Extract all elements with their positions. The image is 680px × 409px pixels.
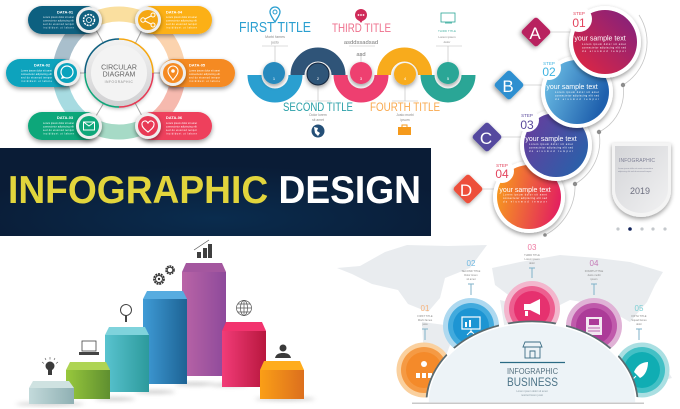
- icon: settings gear: [76, 7, 102, 33]
- node 4: 4: [404, 76, 407, 81]
- dome caption: Lorem ipsum dolor sit amet: [516, 389, 548, 393]
- step 02: consectetur adipiscing elit sed: [555, 94, 600, 98]
- pill: data 03: DATA-03: [57, 115, 74, 120]
- pagination dots: [616, 227, 667, 231]
- pill: data 03: consectetur adipiscing elit: [43, 126, 74, 128]
- label 02: SECOND TITLE: [462, 269, 481, 273]
- pill: data 01: [28, 6, 100, 34]
- text: fourth caption: ipsum: [400, 118, 410, 122]
- step 03: do eiusmod tempor: [529, 150, 573, 153]
- text: first caption: justo: [270, 40, 279, 44]
- pill: data 03: sed do eiusmod tempor: [43, 129, 74, 132]
- pill: data 01: consectetur adipiscing elit: [43, 20, 74, 22]
- step 03: 03: [520, 118, 534, 132]
- step 01: your sample text: [574, 36, 626, 42]
- world map backdrop: [337, 245, 672, 385]
- pill: data 01: sed do eiusmod tempor: [43, 23, 74, 26]
- step 03: [497, 108, 592, 181]
- diamond B: B: [502, 77, 514, 96]
- label 04: 04: [590, 259, 599, 268]
- heading: second title: SECOND TITLE: [283, 100, 353, 114]
- label 02: sit amet: [466, 277, 476, 281]
- text: second caption: [309, 113, 327, 122]
- center hub: INFOGRAPHIC: [105, 80, 133, 84]
- label 05: Squad fames: [631, 318, 647, 322]
- step 01: STEP: [573, 11, 585, 16]
- pill: data 05: consectetur adipiscing elit: [189, 73, 220, 76]
- label 03: THIRD TITLE: [524, 253, 540, 257]
- step 02: 02: [542, 65, 556, 79]
- label 04: FOURTH TITLE: [585, 269, 604, 273]
- pill: data 03: incididunt ut labore: [43, 132, 75, 136]
- pill: data 04: DATA-04: [166, 10, 183, 14]
- label 01: FIRST TITLE: [417, 314, 433, 318]
- icon: light bulb: [42, 357, 58, 375]
- diamond A: [520, 16, 552, 48]
- pill: data 04: incididunt ut labore: [166, 26, 198, 30]
- label 03: dolor: [529, 261, 535, 265]
- node 3: 3: [360, 76, 363, 81]
- diamond B: [493, 69, 525, 101]
- label 02: 02: [467, 259, 476, 268]
- shield badge: INFOGRAPHIC: [619, 158, 655, 164]
- pill: data 04: [138, 6, 212, 34]
- heading: third title: THIRD TITLE: [332, 21, 391, 35]
- step 03: STEP: [521, 113, 533, 118]
- center hub: DIAGRAM: [103, 72, 136, 78]
- icon: rising chart: [194, 240, 212, 258]
- step 04: 04: [495, 167, 509, 181]
- pill: data 06: Lorem ipsum dolor sit amet: [166, 122, 197, 125]
- pill: data 06: DATA-06: [166, 115, 183, 120]
- pill: data 04: consectetur adipiscing elit: [166, 20, 197, 22]
- shield badge: adipiscing elit sed do eiusmod tempor: [618, 170, 652, 173]
- icon: share: [135, 7, 161, 33]
- pill: data 02: [6, 59, 76, 87]
- label 04: [585, 259, 604, 295]
- step 04: do eiusmod tempor: [503, 200, 547, 204]
- text: third title small: [438, 29, 456, 44]
- icon: person: [275, 344, 291, 358]
- node 4: [393, 62, 417, 86]
- label 02: Dolor lorem: [464, 273, 478, 277]
- text: first caption: [265, 35, 285, 44]
- icon: briefcase: [398, 125, 411, 135]
- icon: gears: [154, 266, 174, 284]
- text: third caption: asd: [356, 52, 366, 58]
- pill: data 02: Lorem ipsum dolor sit amet: [21, 70, 52, 72]
- diamond C: [471, 121, 503, 153]
- circle 01: [396, 342, 452, 398]
- step 04: Lorem ipsum dolor sit amet: [503, 194, 547, 196]
- node 3: [350, 62, 372, 84]
- center hub: CIRCULAR: [101, 64, 137, 72]
- connector curves: [545, 15, 647, 235]
- diamond D: D: [460, 181, 472, 200]
- pill: data 03: [28, 112, 100, 140]
- node 5: [437, 62, 459, 84]
- diamond A: A: [529, 24, 541, 43]
- circle 04: [566, 298, 622, 354]
- step 02: STEP: [543, 61, 555, 66]
- panel: wave timeline: [239, 7, 468, 138]
- step 03: consectetur adipiscing elit sed: [529, 146, 574, 150]
- label 01: [417, 304, 433, 340]
- label 03: Lorem ipsum: [524, 257, 540, 261]
- label 02: [462, 259, 481, 295]
- icon: magnifier: [120, 304, 132, 322]
- icon: location pin: [270, 7, 280, 22]
- banner title: INFOGRAPHIC DESIGN: [8, 169, 421, 212]
- bar 4 blue: [143, 291, 187, 384]
- label 01: justo: [421, 322, 428, 326]
- pill: data 02: sed do eiusmod tempor: [21, 76, 52, 80]
- pill: data 06: consectetur adipiscing elit: [166, 126, 197, 128]
- step 02: [520, 56, 613, 128]
- label 01: 01: [421, 304, 430, 313]
- wave segments: [254, 54, 468, 96]
- icon: speech bubble: [355, 9, 367, 23]
- pill: data 05: [160, 59, 235, 87]
- label 01: Morbi fames: [418, 318, 433, 322]
- text: third title small: dolor: [444, 40, 450, 44]
- pill: data 04: Lorem ipsum dolor sit amet: [166, 16, 197, 19]
- pill: data 06: [138, 112, 212, 140]
- step 04: your sample text: [499, 187, 551, 194]
- spokes: [80, 30, 160, 116]
- text: first caption: Morbi fames: [265, 35, 285, 39]
- shield badge: [612, 143, 671, 217]
- pill: data 05: sed do eiusmod tempor: [189, 76, 220, 80]
- icon: store: [523, 342, 542, 358]
- pill: data 04: sed do eiusmod tempor: [166, 23, 197, 26]
- node 1: 1: [273, 76, 276, 81]
- text: fourth caption: Justo morbi: [396, 113, 414, 117]
- icon: map pin: [160, 60, 186, 86]
- pill: data 01: Lorem ipsum dolor sit amet: [43, 16, 74, 19]
- bar 7 orange: [260, 361, 304, 399]
- step 01: consectetur adipiscing elit sed: [582, 46, 627, 50]
- step 04: STEP: [496, 163, 508, 168]
- icon: monitor: [441, 13, 455, 23]
- circle 05: [614, 342, 670, 398]
- text: fourth caption: [396, 113, 414, 122]
- step 04: [473, 159, 565, 233]
- panel: infographic business: [337, 243, 672, 404]
- circle 02: [443, 298, 499, 354]
- banner: [0, 148, 431, 236]
- bar 3 teal: [105, 327, 149, 392]
- text: third title small: Lorem ipsum: [438, 35, 456, 39]
- label 05: FIFTH TITLE: [631, 314, 647, 318]
- bar 1 pale: [29, 381, 74, 404]
- shield badge: Lorem ipsum dolor sit amet consectetur: [618, 167, 653, 170]
- shield badge: 2019: [630, 186, 650, 196]
- node 2: 2: [317, 76, 320, 81]
- pill: data 03: Lorem ipsum dolor sit amet: [43, 122, 74, 125]
- bar 6 pink: [222, 322, 266, 387]
- heading: fourth title: FOURTH TITLE: [370, 100, 440, 114]
- text: third caption: asddssadsad: [344, 40, 378, 46]
- step 04: consectetur adipiscing elit sed: [503, 197, 548, 200]
- pill: data 05: incididunt ut labore: [189, 80, 221, 83]
- icon: chat: [54, 60, 80, 86]
- step 01: 01: [572, 16, 586, 30]
- circle 03: [504, 281, 560, 337]
- pill: data 05: Lorem ipsum dolor sit amet: [189, 70, 220, 72]
- diamond D: [452, 173, 484, 205]
- connector dots: [543, 83, 625, 237]
- pill: data 02: consectetur adipiscing elit: [21, 73, 52, 76]
- panel: circular diagram: [6, 6, 235, 140]
- node 1: [263, 62, 285, 84]
- text: third caption: [344, 40, 378, 58]
- pill: data 02: DATA-02: [34, 62, 51, 68]
- pill: data 05: DATA-05: [189, 62, 206, 68]
- step 03: your sample text: [525, 136, 577, 143]
- label 03: 03: [528, 243, 537, 252]
- label 04: ipsum: [591, 277, 597, 281]
- step 01: Lorem ipsum dolor sit amet: [582, 43, 626, 46]
- text: second caption: sit amet: [312, 118, 324, 122]
- node 2: [306, 62, 330, 86]
- label 04: Justo morbi: [587, 273, 601, 277]
- pill: data 06: sed do eiusmod tempor: [166, 129, 197, 132]
- text: third title small: THIRD TITLE: [438, 29, 456, 33]
- icon: globe: [312, 124, 324, 138]
- heading: first title: FIRST TITLE: [239, 19, 311, 36]
- dome subtitle: BUSINESS: [507, 375, 558, 389]
- center hub: [85, 39, 153, 107]
- pill: data 01: DATA-01: [57, 10, 74, 14]
- icon: envelope: [76, 113, 102, 139]
- label 05: [631, 304, 647, 340]
- icon: heart: [135, 113, 161, 139]
- bar 5 purple: [182, 263, 226, 376]
- pill: data 01: incididunt ut labore: [43, 26, 75, 30]
- step 01: [546, 6, 641, 78]
- step 02: your sample text: [546, 84, 598, 91]
- label 03: [524, 243, 540, 278]
- label 05: 05: [635, 304, 644, 313]
- pill: data 06: incididunt ut labore: [166, 132, 198, 136]
- bar 2 green: [66, 362, 110, 399]
- icon: laptop: [79, 341, 99, 355]
- step 02: Lorem ipsum dolor sit amet: [555, 91, 599, 94]
- dome caption: nostrud lorem justo: [521, 393, 544, 397]
- panel: 3D bar chart: [16, 240, 315, 406]
- dome title: INFOGRAPHIC: [507, 367, 558, 376]
- ring segments: [60, 14, 178, 132]
- panel: steps: [452, 6, 671, 237]
- icon: globe: [236, 300, 252, 316]
- dome caption: [516, 389, 548, 397]
- floor shadows: [16, 382, 315, 406]
- text: second caption: Dolor lorem: [309, 113, 327, 117]
- step 01: do eiusmod tempor: [582, 50, 626, 53]
- step 02: do eiusmod tempor: [555, 98, 599, 101]
- pill: data 02: incididunt ut labore: [21, 80, 53, 83]
- node 5: 5: [447, 76, 450, 81]
- connectors: [262, 46, 462, 101]
- step 03: Lorem ipsum dolor sit amet: [529, 143, 573, 146]
- central dome: [412, 323, 644, 404]
- diamond C: C: [480, 129, 492, 148]
- label 05: dolor: [636, 322, 642, 326]
